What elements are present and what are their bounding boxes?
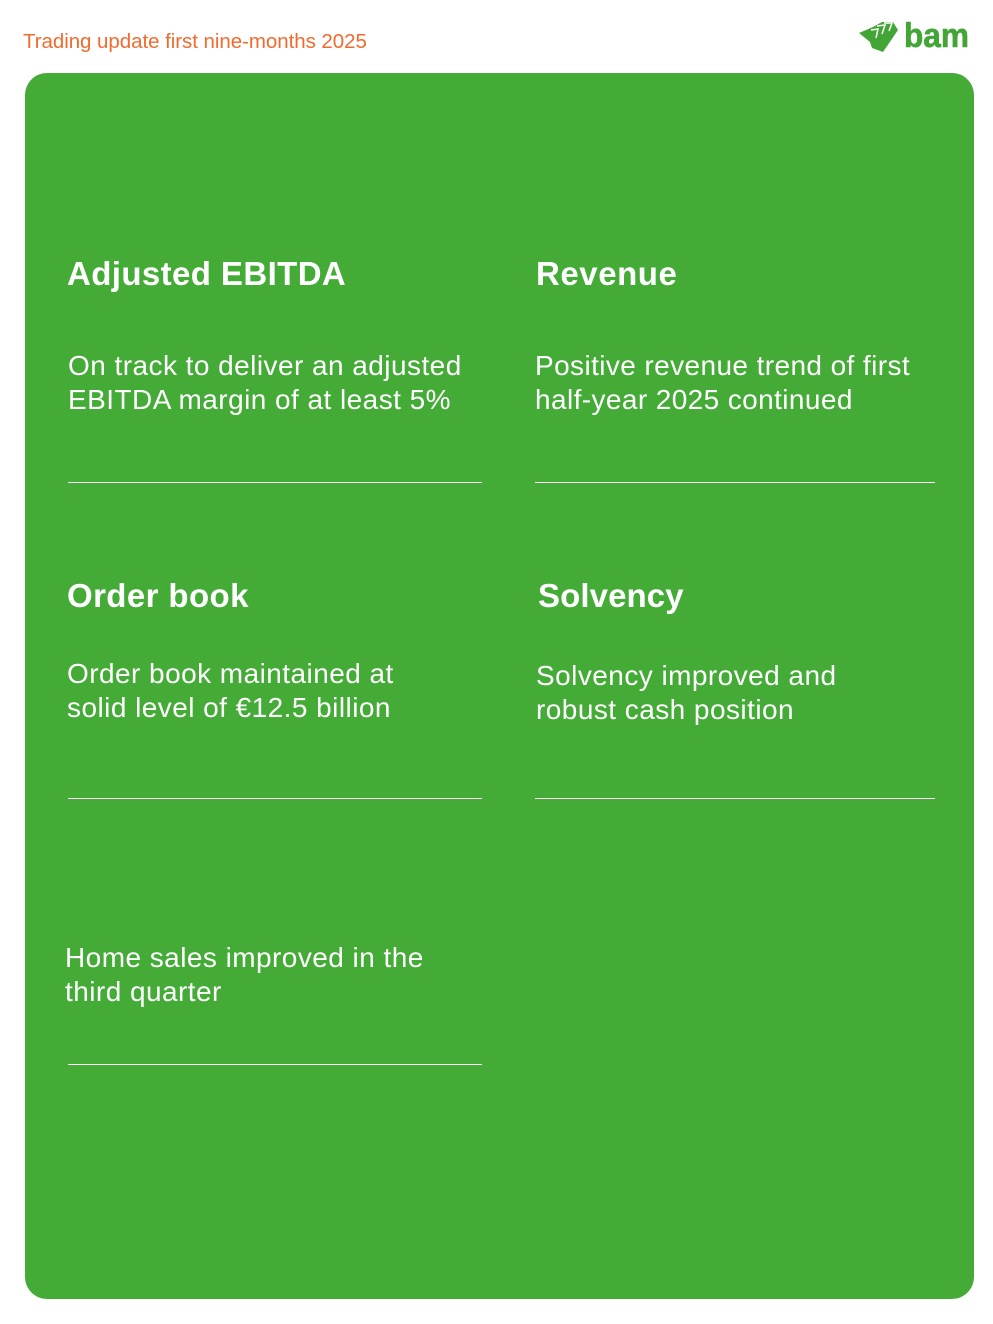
header title: Trading update first nine-months 2025 — [23, 30, 367, 53]
text: adjusted EBITDA: EBITDA margin of at least 5% — [68, 384, 451, 415]
text: home sales — [65, 942, 424, 1007]
text: adjusted EBITDA — [68, 350, 462, 415]
heading: Adjusted EBITDA: Adjusted EBITDA — [67, 255, 346, 292]
text: revenue — [535, 350, 910, 415]
text: order book: solid level of €12.5 billion — [67, 692, 391, 723]
heading: Revenue: Revenue — [536, 255, 677, 292]
text: order book: Order book maintained at — [67, 658, 394, 689]
text: solvency: Solvency improved and — [536, 660, 836, 691]
text: home sales: Home sales improved in the — [65, 942, 424, 973]
text: order book — [67, 658, 394, 723]
logo: bam — [859, 17, 969, 55]
text: adjusted EBITDA: On track to deliver an adjusted — [68, 350, 462, 381]
text: home sales: third quarter — [65, 976, 222, 1007]
heading: Order book: Order book — [67, 577, 249, 614]
text: revenue: Positive revenue trend of first — [535, 350, 910, 381]
logo: bam: bam — [904, 17, 969, 55]
text: solvency: robust cash position — [536, 694, 794, 725]
heading: Solvency: Solvency — [538, 577, 684, 614]
text: revenue: half-year 2025 continued — [535, 384, 853, 415]
text: solvency — [536, 660, 836, 725]
